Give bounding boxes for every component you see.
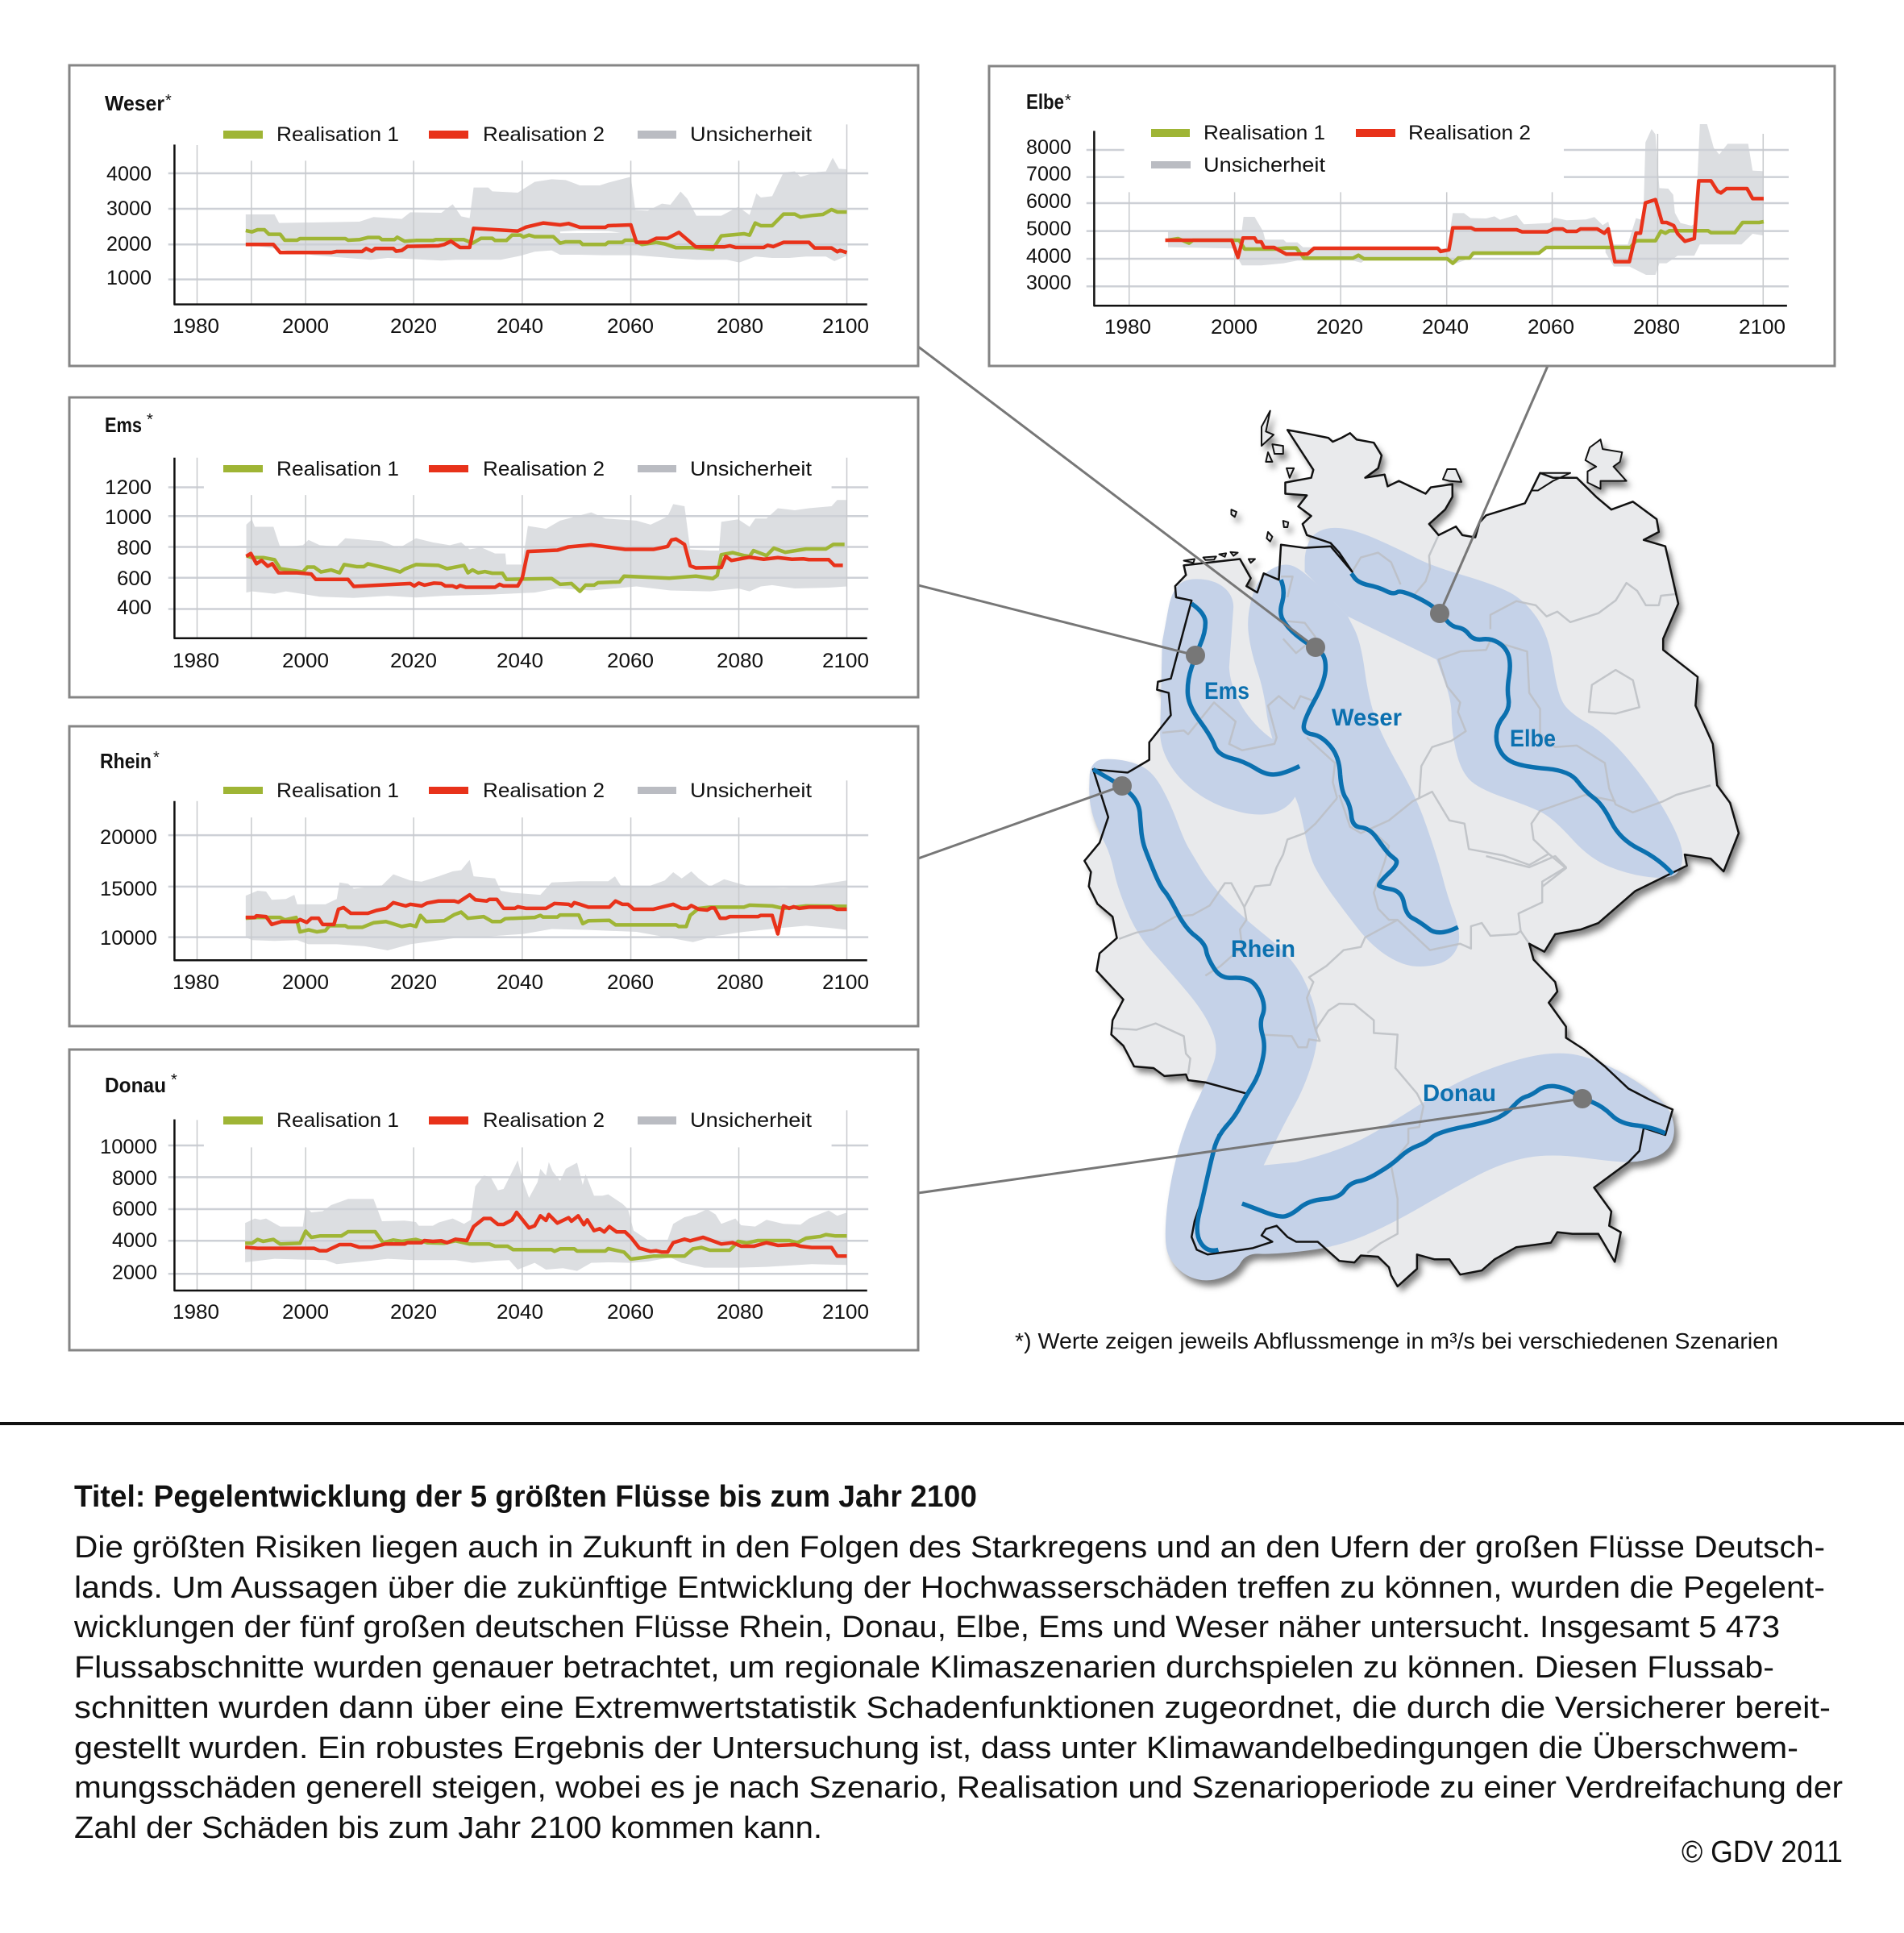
x axis labels: Donau: 2080 <box>717 1301 763 1324</box>
x axis labels: Donau: 2100 <box>822 1301 869 1324</box>
river: Ems <box>1187 604 1299 775</box>
river labels: Elbe <box>1510 725 1556 752</box>
x axis labels: Elbe: 2020 <box>1316 316 1363 339</box>
river: Weser <box>1281 580 1458 933</box>
footnote: *) Werte zeigen jeweils Abflussmenge in m³/s bei verschiedenen Szenarien <box>1015 1328 1778 1353</box>
x axis labels: Elbe: 2000 <box>1211 316 1258 339</box>
panel: Weser: * <box>165 92 172 110</box>
x axis labels: Rhein: 2000 <box>282 971 329 994</box>
state borders <box>1112 535 1711 1253</box>
y axis labels: Rhein: 20000 <box>100 826 157 849</box>
x axis labels: Ems: 2040 <box>497 650 543 672</box>
x axis labels: Rhein: 2100 <box>822 971 869 994</box>
legend: Donau <box>223 1109 812 1132</box>
legend: Weser <box>223 123 812 146</box>
x axis labels: Elbe <box>1104 316 1786 339</box>
legend: Elbe: Unsicherheit <box>1204 154 1325 177</box>
body text: Flussabschnitte wurden genauer betrachtet, um regionale Klimaszenarien durchspielen zu können. Diesen Flussab- <box>74 1651 1774 1685</box>
river labels <box>1204 678 1556 1107</box>
panel: Ems <box>69 397 918 697</box>
y axis labels: Elbe <box>1026 136 1071 294</box>
y axis labels: Donau: 6000 <box>112 1198 157 1220</box>
river labels: Rhein <box>1231 936 1295 962</box>
river: Donau <box>1242 1086 1665 1216</box>
x axis labels: Weser: 2100 <box>822 315 869 338</box>
x axis labels: Donau: 2060 <box>607 1301 654 1324</box>
panel: Rhein: Rhein <box>100 749 152 773</box>
x axis labels: Elbe: 1980 <box>1104 316 1151 339</box>
body text: Die größten Risiken liegen auch in Zukunft in den Folgen des Starkregens und an den Ufern der großen Flüsse Deutsch- <box>74 1531 1825 1565</box>
x axis labels: Ems: 2060 <box>607 650 654 672</box>
gauge markers <box>1112 604 1592 1108</box>
river labels: Weser <box>1332 705 1402 731</box>
rivers <box>1093 573 1673 1250</box>
legend: Ems: Realisation 2 <box>483 458 605 480</box>
y axis labels: Elbe: 6000 <box>1026 190 1071 213</box>
x axis labels: Weser: 2060 <box>607 315 654 338</box>
y axis labels: Elbe: 3000 <box>1026 272 1071 294</box>
legend: Elbe: Realisation 2 <box>1408 122 1531 144</box>
river labels: Donau <box>1423 1080 1496 1107</box>
x axis labels: Rhein: 2040 <box>497 971 543 994</box>
y axis labels: Donau: 4000 <box>112 1229 157 1252</box>
x axis labels: Ems: 2080 <box>717 650 763 672</box>
panel: Donau: * <box>171 1071 177 1089</box>
y axis labels: Donau <box>100 1136 157 1284</box>
legend: Elbe: Realisation 1 <box>1204 122 1325 144</box>
x axis labels: Weser: 1980 <box>173 315 219 338</box>
x axis labels: Donau: 2040 <box>497 1301 543 1324</box>
legend: Ems: Unsicherheit <box>690 458 812 480</box>
river: Elbe <box>1351 573 1673 874</box>
panel: Elbe: * <box>1065 92 1071 110</box>
x axis labels: Weser: 2020 <box>390 315 437 338</box>
y axis labels: Weser: 3000 <box>106 197 152 220</box>
legend: Weser: Unsicherheit <box>690 123 812 146</box>
river: Rhein <box>1093 769 1264 1250</box>
x axis labels: Rhein: 1980 <box>173 971 219 994</box>
legend: Donau: Realisation 2 <box>483 1109 605 1132</box>
chart: Ems <box>168 458 868 638</box>
x axis labels: Rhein <box>173 971 869 994</box>
x axis labels: Ems: 2000 <box>282 650 329 672</box>
copyright: © GDV 2011 <box>1682 1835 1843 1869</box>
y axis labels: Weser <box>106 163 152 289</box>
y axis labels: Weser: 4000 <box>106 163 152 185</box>
river labels: Ems <box>1204 678 1249 705</box>
x axis labels: Weser: 2080 <box>717 315 763 338</box>
legend: Weser: Realisation 1 <box>276 123 399 146</box>
panel: Donau <box>69 1050 918 1350</box>
body text: Zahl der Schäden bis zum Jahr 2100 kommen kann. <box>74 1811 822 1845</box>
x axis labels: Elbe: 2100 <box>1739 316 1786 339</box>
x axis labels: Ems <box>173 650 869 672</box>
y axis labels: Donau: 8000 <box>112 1167 157 1190</box>
map base: country, rivers corridors <box>1084 411 1739 1287</box>
body text: mungsschäden generell steigen, wobei es je nach Szenario, Realisation und Szenarioperiode zu einer Verdreifachung der <box>74 1771 1843 1805</box>
title: Titel: Pegelentwicklung der 5 größten Flüsse bis zum Jahr 2100 <box>74 1480 977 1514</box>
body text: lands. Um Aussagen über die zukünftige Entwicklung der Hochwasserschäden treffen zu können, wurden die Pegelent- <box>74 1571 1825 1605</box>
x axis labels: Donau: 2020 <box>390 1301 437 1324</box>
chart: Donau <box>168 1110 868 1291</box>
panel: Weser: Weser <box>105 91 164 115</box>
x axis labels: Weser <box>173 315 869 338</box>
y axis labels: Weser: 1000 <box>106 267 152 289</box>
legend: Rhein: Unsicherheit <box>690 779 812 802</box>
body text: schnitten wurden dann über eine Extremwertstatistik Schadenfunktionen zugeordnet, die durch die Versicherer bereit- <box>74 1691 1831 1725</box>
panel: Weser <box>69 65 918 366</box>
y axis labels: Ems: 1200 <box>105 476 152 499</box>
y axis labels: Donau: 10000 <box>100 1136 157 1158</box>
body text: gestellt wurden. Ein robustes Ergebnis der Untersuchung ist, dass unter Klimawandelbedingungen die Überschwem- <box>74 1731 1798 1765</box>
panel: Elbe <box>989 66 1835 366</box>
chart: Rhein <box>168 780 868 960</box>
x axis labels: Elbe: 2040 <box>1422 316 1469 339</box>
x axis labels: Elbe: 2080 <box>1633 316 1680 339</box>
legend: Donau: Unsicherheit <box>690 1109 812 1132</box>
y axis labels: Rhein: 10000 <box>100 927 157 950</box>
x axis labels: Donau: 1980 <box>173 1301 219 1324</box>
y axis labels: Ems: 600 <box>117 567 152 590</box>
y axis labels: Rhein: 15000 <box>100 878 157 900</box>
y axis labels: Ems: 800 <box>117 537 152 559</box>
y axis labels: Elbe: 8000 <box>1026 136 1071 159</box>
chart: Weser <box>168 124 868 305</box>
legend: Weser: Realisation 2 <box>483 123 605 146</box>
y axis labels: Ems: 400 <box>117 597 152 619</box>
legend: Ems <box>223 458 812 480</box>
panel: Ems: * <box>147 411 153 429</box>
y axis labels: Elbe: 7000 <box>1026 163 1071 185</box>
x axis labels: Rhein: 2080 <box>717 971 763 994</box>
y axis labels: Weser: 2000 <box>106 233 152 256</box>
body text: wicklungen der fünf großen deutschen Flüsse Rhein, Donau, Elbe, Ems und Weser näher untersucht. Insgesamt 5 473 <box>73 1611 1780 1644</box>
y axis labels: Elbe: 5000 <box>1026 218 1071 240</box>
legend: Rhein: Realisation 1 <box>276 779 399 802</box>
y axis labels: Rhein <box>100 826 157 950</box>
y axis labels: Elbe: 4000 <box>1026 245 1071 268</box>
legend: Rhein <box>223 779 812 802</box>
y axis labels: Ems: 1000 <box>105 506 152 529</box>
panel: Donau: Donau <box>105 1073 166 1097</box>
body text <box>73 1531 1843 1845</box>
x axis labels: Ems: 2100 <box>822 650 869 672</box>
y axis labels: Donau: 2000 <box>112 1262 157 1284</box>
x axis labels: Donau <box>173 1301 869 1324</box>
legend: Rhein: Realisation 2 <box>483 779 605 802</box>
y axis labels: Ems <box>105 476 152 619</box>
country outline <box>1084 411 1739 1287</box>
x axis labels: Weser: 2000 <box>282 315 329 338</box>
leader lines from panels to gauges <box>918 347 1582 1193</box>
panel: Rhein <box>69 726 918 1026</box>
panel: Elbe: Elbe <box>1026 89 1064 114</box>
x axis labels: Rhein: 2020 <box>390 971 437 994</box>
x axis labels: Ems: 1980 <box>173 650 219 672</box>
chart: Elbe <box>1087 124 1789 306</box>
x axis labels: Donau: 2000 <box>282 1301 329 1324</box>
map of Germany <box>1084 411 1739 1287</box>
legend: Ems: Realisation 1 <box>276 458 399 480</box>
panel: Ems: Ems <box>105 413 142 437</box>
legend: Donau: Realisation 1 <box>276 1109 399 1132</box>
panel: Rhein: * <box>153 749 160 767</box>
x axis labels: Weser: 2040 <box>497 315 543 338</box>
x axis labels: Rhein: 2060 <box>607 971 654 994</box>
legend: Elbe <box>1151 122 1531 177</box>
x axis labels: Ems: 2020 <box>390 650 437 672</box>
river corridor bands <box>1089 528 1682 1280</box>
x axis labels: Elbe: 2060 <box>1528 316 1574 339</box>
